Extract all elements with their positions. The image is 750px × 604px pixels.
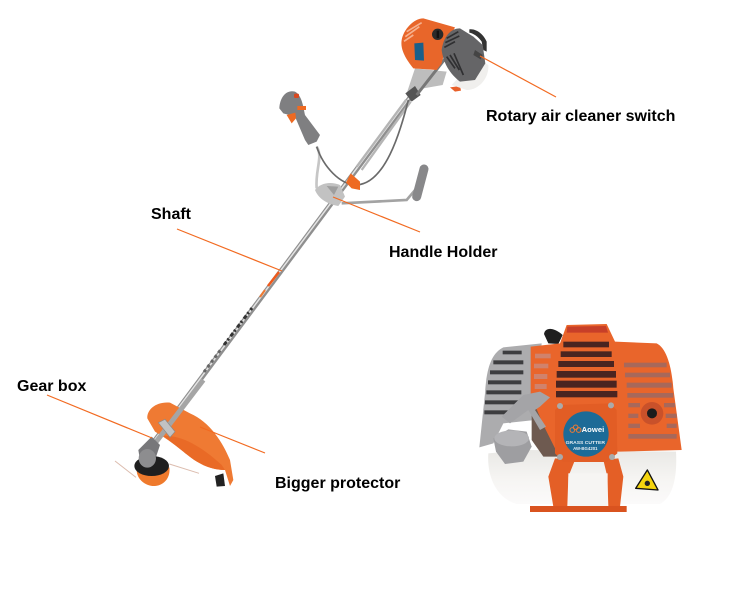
trimmer head group with guard	[115, 380, 233, 487]
label: handle holder: Handle Holder	[389, 244, 497, 261]
leader lines	[47, 56, 556, 453]
label: bigger protector: Bigger protector	[275, 475, 400, 492]
badge: Aowei logo: Aowei	[582, 425, 604, 434]
icon: warning triangle	[636, 470, 658, 490]
icon: engine orange body	[401, 18, 455, 70]
icon: gray primer cap	[493, 429, 532, 464]
icon: engine recoil cover	[442, 28, 487, 82]
icon: cover plate	[555, 402, 617, 462]
icon: engine tank	[452, 58, 488, 90]
main shaft	[153, 94, 412, 443]
badge: Aowei logo: GRASS CUTTER	[566, 440, 605, 446]
badge: Aowei logo: AW-BG4201	[573, 446, 598, 451]
icon: bigger protector guard	[147, 403, 233, 487]
icon: black knob	[544, 329, 563, 344]
icon: orange legs	[530, 458, 627, 512]
top assembly: engine, handles, cable	[279, 18, 488, 206]
dark inner gap	[532, 403, 560, 457]
icon: handle holder	[315, 173, 360, 206]
icon: engine neck	[405, 57, 461, 102]
label: rotary air cleaner switch: Rotary air cleaner switch	[486, 108, 675, 125]
label: shaft: Shaft	[151, 206, 192, 223]
icon: gray pull handle	[502, 392, 550, 430]
detail engine image	[479, 324, 682, 512]
icon: white fuel tank	[488, 450, 676, 504]
icon: orange shroud	[531, 324, 682, 452]
icon: gray fan housing	[479, 343, 542, 447]
label: gear box: Gear box	[17, 378, 86, 395]
badge: Aowei logo	[563, 411, 609, 457]
control cable	[317, 100, 408, 185]
clamp	[158, 419, 175, 437]
shaft over guard	[155, 380, 203, 443]
icon: handlebar loop	[316, 100, 424, 203]
icon: throttle grip	[279, 91, 320, 145]
icon: gear box and spool	[115, 437, 199, 486]
